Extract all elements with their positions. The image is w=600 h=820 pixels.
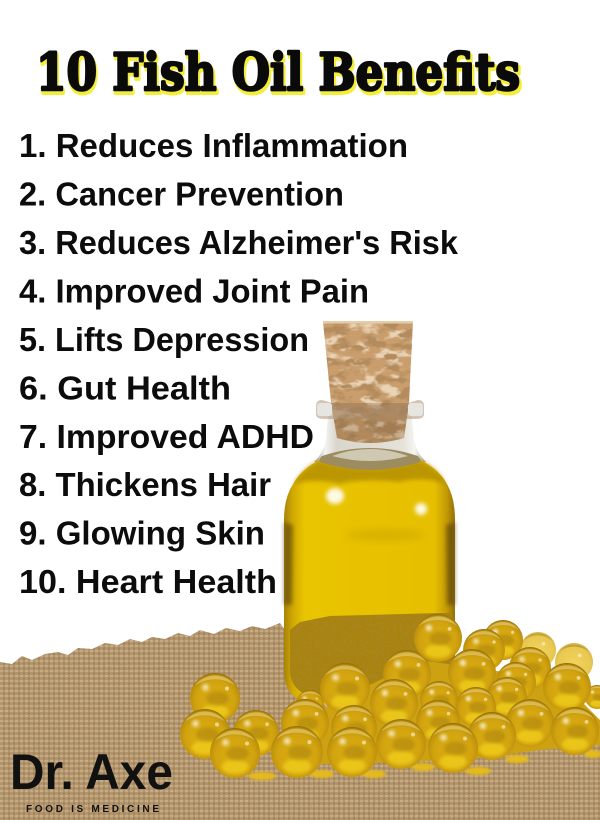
burlap seen through oil [290,613,450,698]
bottle body with oil [284,460,455,704]
burlap cloth [0,623,600,820]
shaded edges [284,522,455,605]
golden fill between capsules [280,660,600,764]
darker oil shoulder [294,460,446,484]
Dr. Axe logo: Dr. Axe [10,744,173,800]
title: 10 Fish Oil Benefits [36,43,520,103]
benefits list: 3. Reduces Alzheimer's Risk [19,224,459,261]
cork stopper [323,321,413,443]
title: 10 Fish Oil Benefits [37,46,522,106]
highlights in bottle [326,488,344,504]
bottle neck glass [314,416,426,462]
cork darkening inside neck [331,403,409,443]
benefits list [19,127,459,600]
benefits list: 9. Glowing Skin [19,514,265,552]
benefits list: 5. Lifts Depression [19,321,309,358]
benefits list: 10. Heart Health [19,563,277,600]
benefits list: 7. Improved ADHD [19,418,314,455]
oil bottle [284,321,455,704]
benefits list: 2. Cancer Prevention [19,176,344,212]
glass meniscus [319,448,421,470]
benefits list: 4. Improved Joint Pain [19,272,369,310]
benefits list: 6. Gut Health [19,370,231,406]
Dr. Axe logo: FOOD IS MEDICINE [26,804,159,815]
bottle lip [316,400,424,419]
capsule pile [180,614,600,780]
benefits list: 8. Thickens Hair [19,466,271,503]
benefits list: 1. Reduces Inflammation [19,127,408,164]
oil glow on cloth [248,750,600,780]
